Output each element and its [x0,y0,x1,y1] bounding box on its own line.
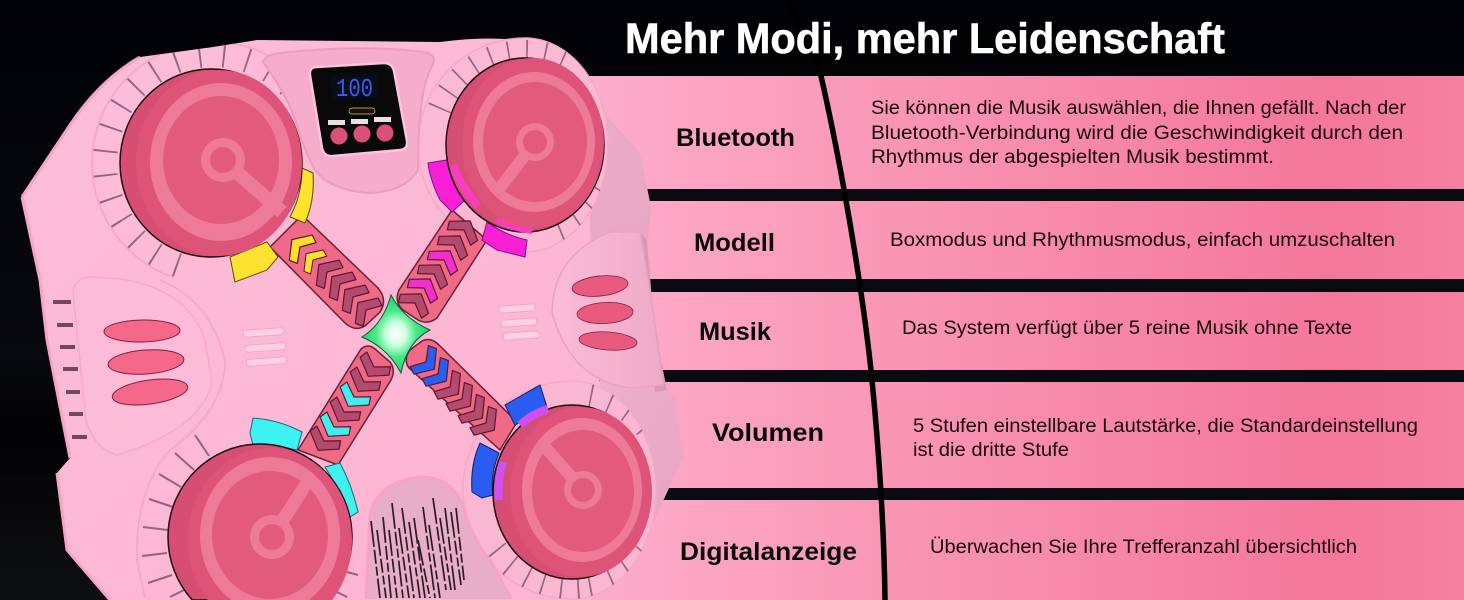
buttons [330,124,394,144]
row: Modell [694,229,1395,257]
dial ring: bottom right [463,381,656,599]
small stripes right [499,304,539,340]
side wing top right [540,85,651,300]
side wing bottom right [590,380,683,565]
arm: top left [270,215,384,329]
comparison table [575,0,1464,600]
dial: top left [120,69,302,257]
row: Modell: Modell [694,229,775,257]
grip pills [571,273,629,299]
arm: bottom right [406,340,517,450]
arm: top right [396,210,487,322]
dial ring: top right [418,38,608,252]
row: Volumen [712,416,1418,461]
row: Volumen: 5 Stufen einstellbare Lautstärke, die Standardeinstellung [913,416,1418,437]
small labels [328,108,391,125]
arm: bottom left [298,346,393,465]
led screen [330,73,378,100]
row: Volumen: Volumen [712,419,824,447]
light buttons: yellow [230,168,313,282]
light buttons: blue [472,385,547,498]
grip pills [104,319,180,343]
speaker [366,477,512,599]
title: Mehr Modi, mehr Leidenschaft [625,15,1225,63]
dial ring: top left [91,43,269,278]
ticks: top left [94,45,282,276]
small stripes left [243,328,287,366]
row: Volumen: ist die dritte Stufe [913,440,1069,461]
row: Bluetooth: Bluetooth [676,124,795,152]
row: Bluetooth: Sie können die Musik auswählen, die Ihnen gefällt. Nach der [871,98,1407,119]
row: Digitalanzeige: Digitalanzeige [680,538,857,566]
row: Musik: Musik [699,318,771,346]
light buttons: cyan [250,418,358,517]
ticks: bottom right [488,384,642,599]
display pocket [263,48,434,193]
row: Digitalanzeige [680,537,1357,566]
row: Bluetooth: Rhythmus der abgespielten Musik bestimmt. [871,147,1274,168]
digital display: 100 [336,74,373,104]
digital display [310,63,407,156]
row dividers [575,189,1464,500]
row: Bluetooth: Bluetooth-Verbindung wird die Geschwindigkeit durch den [871,123,1403,144]
device body [22,38,630,600]
row: Musik [699,318,1352,346]
row: Modell: Boxmodus und Rhythmusmodus, einfach umzuschalten [890,230,1395,251]
boxing machine device [22,9,686,600]
center light [362,295,430,373]
ticks: top right [428,40,600,240]
dial: bottom right [493,405,652,579]
row: Digitalanzeige: Überwachen Sie Ihre Trefferanzahl übersichtlich [930,537,1357,558]
right grip [552,232,663,388]
curved column divider [787,0,885,600]
light buttons: magenta [428,160,527,257]
row: Bluetooth [676,98,1407,168]
dial: bottom left [168,444,352,600]
right side ribs [640,232,667,392]
left side vents [53,300,87,439]
table background [575,76,1464,600]
left grip [73,277,212,455]
dial: top right [446,58,604,232]
row: Musik: Das System verfügt über 5 reine Musik ohne Texte [902,318,1352,339]
dial ring: bottom left [137,280,225,598]
ticks: bottom left [142,435,358,597]
